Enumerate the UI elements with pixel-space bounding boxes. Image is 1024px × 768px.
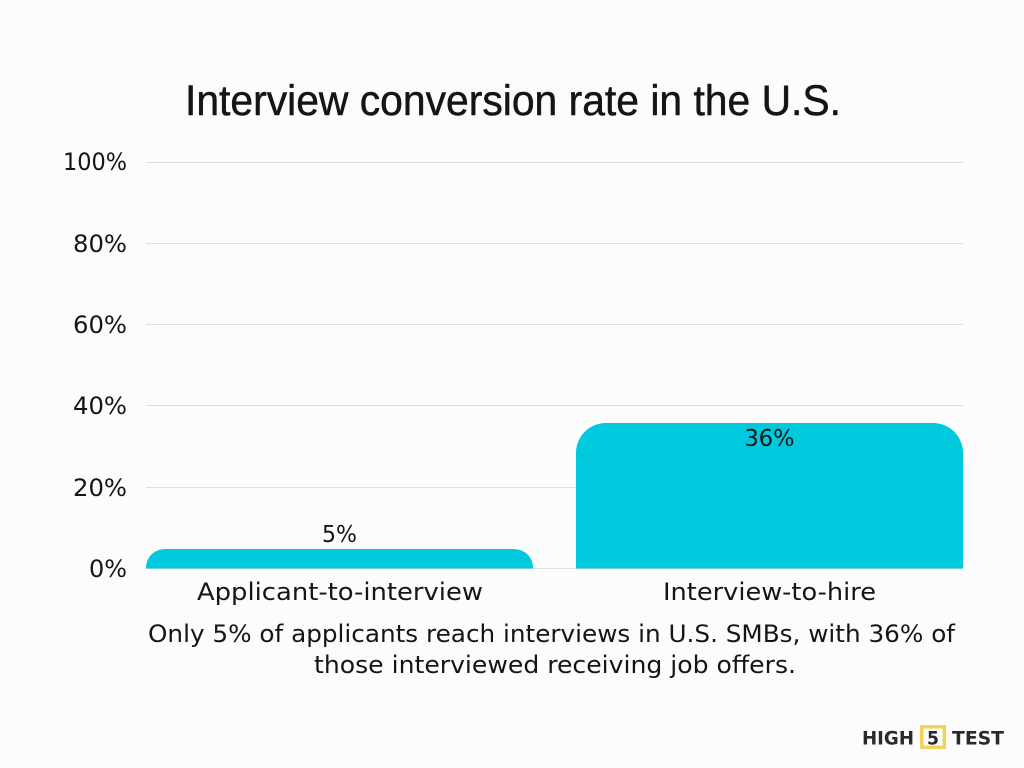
logo: High 5 Test: HIGH (862, 728, 914, 750)
bar chart (63, 148, 963, 606)
y-axis labels: 100% (63, 148, 127, 176)
y-axis labels: 20% (73, 474, 127, 502)
bar: interview-to-hire 36% (576, 423, 963, 568)
logo: High 5 Test: 5 (927, 728, 939, 750)
y-axis labels (63, 148, 127, 583)
value label: 36%: 36% (744, 426, 794, 452)
y-axis labels: 40% (73, 392, 127, 420)
title: Interview conversion rate in the U.S. (185, 77, 841, 125)
logo: High 5 Test: TEST (952, 728, 1004, 750)
caption: those interviewed receiving job offers. (314, 651, 796, 679)
y-axis labels: 0% (89, 555, 127, 583)
logo: High 5 Test (862, 727, 1004, 750)
category label: applicant-to-interview: Applicant-to-interview (197, 578, 483, 606)
category label: interview-to-hire: Interview-to-hire (663, 578, 876, 606)
y-axis labels: 80% (73, 230, 127, 258)
bar: applicant-to-interview 5% (146, 549, 533, 568)
y-axis labels: 60% (73, 311, 127, 339)
value label: 5%: 5% (322, 522, 357, 548)
caption: Only 5% of applicants reach interviews in U.S. SMBs, with 36% of (148, 620, 956, 648)
caption (148, 620, 956, 679)
